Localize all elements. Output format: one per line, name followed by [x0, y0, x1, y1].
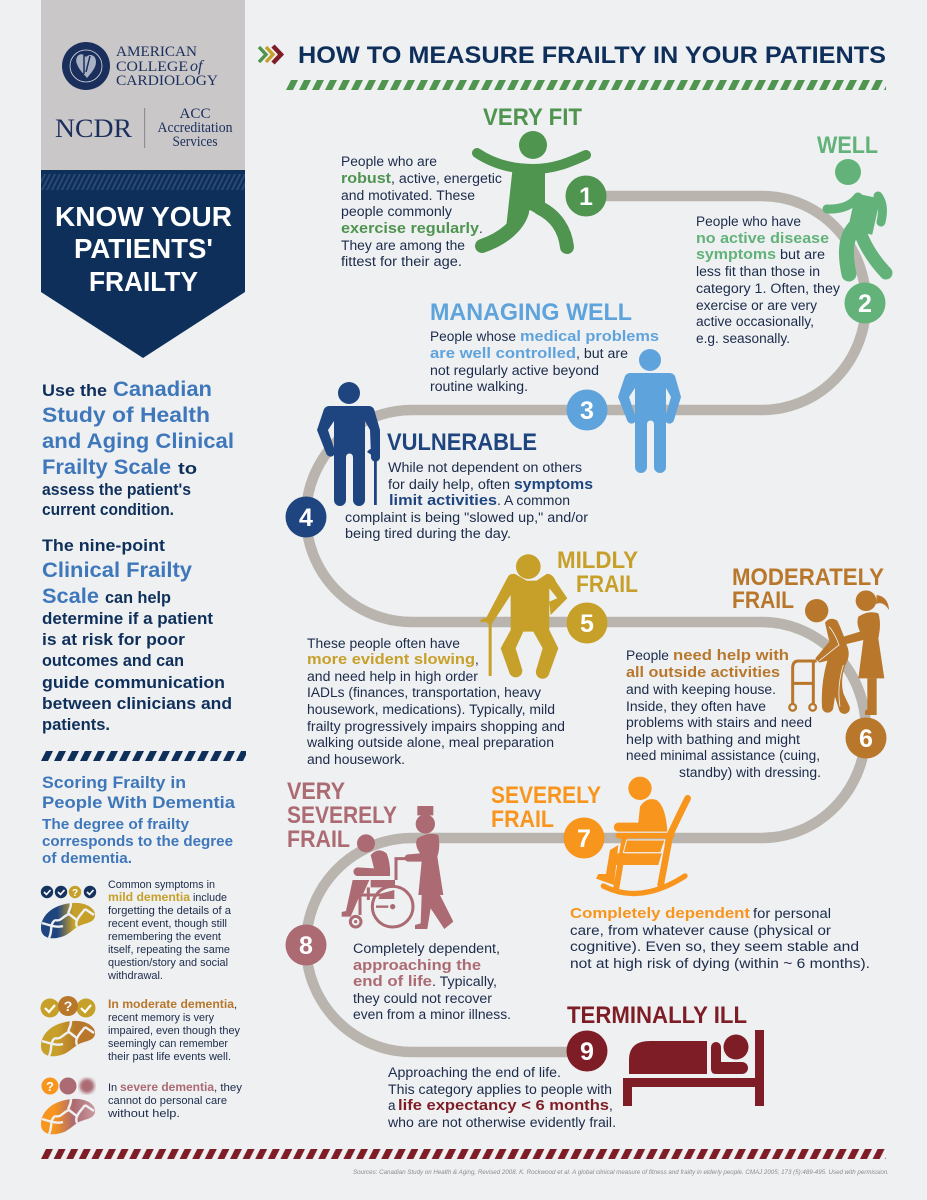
description: While not dependent on others — [388, 460, 582, 475]
text: severe dementia: without help. — [107, 1108, 180, 1120]
description: People — [626, 648, 669, 663]
number badge: 9 — [580, 1038, 594, 1066]
text block: nine-point scale: outcomes and can — [42, 652, 184, 670]
icon: bed — [623, 1030, 764, 1106]
description: They are among the — [341, 238, 465, 253]
text block: use the scale: to — [178, 460, 197, 478]
description: medical problems — [520, 328, 659, 345]
heading: scoring frailty in dementia: of dementia. — [42, 851, 132, 867]
description: standby) with dressing. — [679, 765, 821, 780]
text: severe dementia: In — [108, 1082, 117, 1094]
text block: use the scale: current condition. — [42, 501, 174, 519]
description: people commonly — [341, 204, 452, 219]
step 3: managing well — [430, 299, 681, 473]
text block: nine-point scale: patients. — [42, 716, 110, 734]
text: moderate dementia: In moderate dementia — [108, 999, 235, 1011]
icon: leaping figure — [477, 131, 586, 247]
description — [696, 214, 840, 346]
text block: nine-point scale: Clinical Frailty — [42, 559, 192, 582]
heading: SEVERELY — [287, 802, 397, 829]
heading — [732, 564, 884, 614]
banner: know your patients' frailty: KNOW YOUR — [55, 201, 232, 232]
icon: wheelchair and nurse — [342, 806, 453, 929]
description: are well controlled — [430, 345, 576, 362]
icon: stooped figure with cane — [480, 554, 567, 679]
description: complaint is being "slowed up," and/or — [345, 510, 589, 525]
description: a — [388, 1098, 396, 1113]
description: and need help in high order — [307, 669, 479, 684]
description: and housework. — [307, 752, 405, 767]
number badge — [286, 924, 326, 966]
heading: scoring frailty in dementia: People With Dementia — [42, 793, 236, 812]
text block: nine-point scale: Scale — [42, 585, 99, 608]
text: mild dementia: include — [193, 892, 227, 904]
description — [387, 1065, 616, 1130]
text: moderate dementia: their past life events well. — [108, 1051, 231, 1063]
icon: moderate dementia — [40, 996, 96, 1056]
text block: use the scale: and Aging Clinical — [42, 430, 234, 453]
description: no active disease — [696, 230, 829, 247]
description — [345, 460, 593, 541]
description: robust — [341, 170, 391, 187]
number badge — [846, 718, 886, 758]
description: even from a minor illness. — [353, 1007, 511, 1022]
ACC wordmark — [116, 44, 218, 89]
description: People who are — [341, 154, 437, 169]
description: but are — [780, 247, 825, 262]
description: not regularly active beyond — [430, 363, 599, 378]
heading: VULNERABLE — [387, 429, 537, 456]
description: frailty progressively impairs shopping and — [307, 719, 565, 734]
description: , but are — [576, 346, 628, 361]
description: walking outside alone, meal preparation — [306, 735, 554, 750]
heading: scoring frailty in dementia: corresponds to the degree — [42, 834, 233, 850]
ACC wordmark: COLLEGE — [116, 59, 188, 75]
number badge — [566, 176, 606, 216]
description: People whose — [430, 329, 516, 344]
ACC wordmark: CARDIOLOGY — [116, 73, 218, 89]
icon: chevrons — [259, 46, 281, 63]
heading: scoring frailty in dementia: Scoring Frailty in — [42, 773, 186, 792]
icon: severe dementia — [41, 1078, 95, 1134]
icon: figure with cane — [317, 382, 380, 506]
description — [306, 636, 565, 767]
description: need help with — [673, 647, 789, 664]
description: care, from whatever cause (physical or — [570, 923, 832, 938]
heading: scoring frailty in dementia: The degree of frailty — [42, 817, 189, 833]
text block: nine-point scale: guide communication — [42, 674, 225, 692]
text: moderate dementia — [108, 999, 240, 1063]
step 8: very severely frail — [286, 778, 511, 1022]
heading — [557, 547, 638, 598]
text: mild dementia: remembering the event — [108, 931, 221, 943]
banner: know your patients' frailty — [41, 170, 245, 358]
heading — [491, 782, 601, 833]
description: , active, energetic — [391, 171, 502, 186]
title: HOW TO MEASURE FRAILTY IN YOUR PATIENTS — [298, 42, 886, 69]
description: all outside activities — [626, 664, 780, 681]
number badge: 6 — [859, 725, 873, 753]
text: mild dementia — [107, 879, 232, 982]
text block: use the scale: Canadian — [113, 378, 212, 401]
step 4: vulnerable — [286, 382, 593, 541]
text: moderate dementia: seemingly can remember — [108, 1038, 228, 1050]
number badge — [564, 818, 604, 858]
NCDR wordmark: NCDR — [55, 114, 133, 143]
ACC accreditation services: Accreditation — [158, 120, 233, 136]
heading: FRAIL — [491, 806, 554, 833]
text: mild dementia: withdrawal. — [107, 970, 163, 982]
heading: VERY FIT — [483, 104, 582, 131]
step 2: well — [696, 132, 886, 346]
text: severe dementia: , they — [214, 1082, 243, 1094]
icon: walking figure — [827, 159, 886, 274]
heading: TERMINALLY ILL — [567, 1002, 747, 1029]
text: mild dementia: itself, repeating the same — [108, 944, 230, 956]
description: Inside, they often have — [626, 699, 766, 714]
icon: figure in rocking chair — [596, 777, 688, 894]
description: These people often have — [307, 636, 460, 651]
icon: ACC seal — [62, 42, 110, 90]
text block: use the scale: Frailty Scale — [42, 456, 171, 479]
heading: FRAIL — [576, 571, 638, 598]
ACC accreditation services — [158, 106, 233, 150]
banner: know your patients' frailty: FRAILTY — [89, 266, 198, 297]
description: People who have — [696, 214, 801, 229]
text block: nine-point scale: is at risk for poor — [42, 631, 186, 649]
description: exercise regularly — [341, 220, 480, 237]
description: problems with stairs and need — [626, 715, 812, 730]
heading: FRAIL — [287, 826, 350, 853]
icon: mild dementia: ? — [72, 888, 78, 899]
heading: WELL — [817, 132, 878, 159]
description: , — [475, 652, 479, 667]
description — [353, 941, 511, 1022]
description: category 1. Often, they — [696, 281, 840, 296]
description — [430, 328, 659, 394]
description: for personal — [753, 906, 831, 921]
number badge — [844, 282, 886, 324]
text: moderate dementia: recent memory is very — [108, 1012, 214, 1024]
number badge — [286, 496, 326, 538]
description: , — [609, 1098, 613, 1113]
text block: use the scale: assess the patient's — [42, 481, 191, 499]
icon: severe dementia: ? — [46, 1079, 54, 1094]
text block: nine-point scale: between clinicians and — [42, 695, 232, 713]
step 7: severely frail — [491, 777, 870, 971]
number badge: 2 — [858, 290, 872, 318]
step 1: very fit — [341, 104, 606, 269]
heading: SEVERELY — [491, 782, 601, 809]
text: moderate dementia: , — [234, 999, 237, 1011]
number badge: 4 — [299, 504, 313, 532]
winding path — [306, 196, 866, 1052]
description: symptoms — [514, 476, 593, 493]
description: help with bathing and might — [626, 732, 800, 747]
description: they could not recover — [353, 991, 493, 1006]
text: moderate dementia: impaired, even though they — [108, 1025, 240, 1037]
text block: nine-point scale: can help — [105, 589, 171, 607]
description: and with keeping house. — [626, 682, 776, 697]
description: exercise or are very — [696, 298, 817, 313]
description: more evident slowing — [307, 651, 475, 668]
description: Approaching the end of life. — [388, 1065, 561, 1080]
text: mild dementia: question/story and social — [108, 957, 228, 969]
description: being tired during the day. — [345, 526, 511, 541]
description: who are not otherwise evidently frail. — [387, 1115, 616, 1130]
heading: FRAIL — [732, 587, 794, 614]
number badge — [566, 1030, 608, 1072]
text block: nine-point scale — [42, 537, 232, 734]
icon: mild dementia — [41, 886, 96, 938]
description: symptoms — [696, 246, 776, 263]
text block: use the scale — [42, 378, 234, 519]
description: need minimal assistance (cuing, — [626, 748, 820, 763]
sources: Sources: Canadian Study on Health & Aging, Revised 2008. K. Rockwood et al. A global clinical measure of fitness and frailty in elderly people. CMAJ 2005; 173 (5):489-495. Used with permission. — [353, 1169, 889, 1176]
ACC wordmark: AMERICAN — [116, 44, 197, 60]
description: fittest for their age. — [341, 254, 462, 269]
heading: scoring frailty in dementia — [42, 773, 236, 867]
text: severe dementia: severe dementia — [120, 1082, 215, 1094]
description: life expectancy < 6 months — [398, 1097, 609, 1114]
text: mild dementia: Common symptoms in — [108, 879, 215, 891]
number badge: 3 — [580, 397, 594, 425]
icon: moderate dementia: ? — [64, 998, 72, 1014]
panel: logos — [41, 0, 245, 170]
description: limit activities — [389, 492, 497, 509]
description: not at high risk of dying (within ~ 6 months). — [570, 956, 870, 971]
step 9: terminally ill — [387, 1002, 764, 1130]
text: mild dementia: mild dementia — [108, 892, 191, 904]
text block: use the scale: Use the — [42, 382, 107, 400]
heading: MANAGING WELL — [430, 299, 632, 326]
text: mild dementia: recent event, though still — [108, 918, 227, 930]
step 6: moderately frail — [626, 564, 889, 780]
number badge: 7 — [577, 825, 591, 853]
description: less fit than those in — [696, 264, 820, 279]
text block: use the scale: Study of Health — [42, 404, 210, 427]
icon: standing figure — [618, 349, 681, 473]
description — [626, 647, 821, 780]
step 5: mildly frail — [306, 547, 638, 767]
description: . — [479, 221, 483, 236]
description: . Typically, — [432, 974, 497, 989]
text: severe dementia: cannot do personal care — [108, 1095, 227, 1107]
icon: patient with walker and helper — [789, 590, 889, 715]
number badge — [566, 390, 608, 430]
description: and motivated. These — [341, 188, 475, 203]
text block: nine-point scale: determine if a patient — [42, 610, 214, 628]
heading: MILDLY — [557, 547, 638, 574]
description: active occasionally, — [696, 314, 814, 329]
text: severe dementia — [107, 1082, 243, 1120]
description: . A common — [497, 493, 570, 508]
number badge: 5 — [580, 610, 594, 638]
description: cognitive). Even so, they seem stable and — [570, 939, 859, 954]
text: mild dementia: forgetting the details of a — [108, 905, 232, 917]
number badge: 8 — [299, 932, 313, 960]
description — [570, 905, 870, 971]
description: routine walking. — [430, 379, 528, 394]
number badge — [566, 602, 608, 644]
banner: know your patients' frailty: PATIENTS' — [74, 233, 213, 264]
description: IADLs (finances, transportation, heavy — [307, 685, 541, 700]
description: Completely dependent — [570, 905, 750, 922]
description: Completely dependent, — [353, 941, 500, 956]
ACC wordmark: of — [190, 58, 205, 75]
description: housework, medications). Typically, mild — [307, 702, 555, 717]
number badge: 1 — [579, 183, 593, 211]
description: for daily help, often — [388, 477, 510, 492]
description: e.g. seasonally. — [696, 331, 790, 346]
heading: VERY — [287, 778, 345, 805]
description — [341, 154, 502, 269]
text block: nine-point scale: The nine-point — [42, 537, 166, 555]
ACC accreditation services: Services — [172, 134, 218, 150]
heading — [287, 778, 397, 853]
description: end of life — [353, 973, 432, 990]
description: This category applies to people with — [388, 1082, 612, 1097]
description: approaching the — [353, 957, 481, 974]
ACC accreditation services: ACC — [180, 106, 210, 122]
heading: MODERATELY — [732, 564, 884, 591]
